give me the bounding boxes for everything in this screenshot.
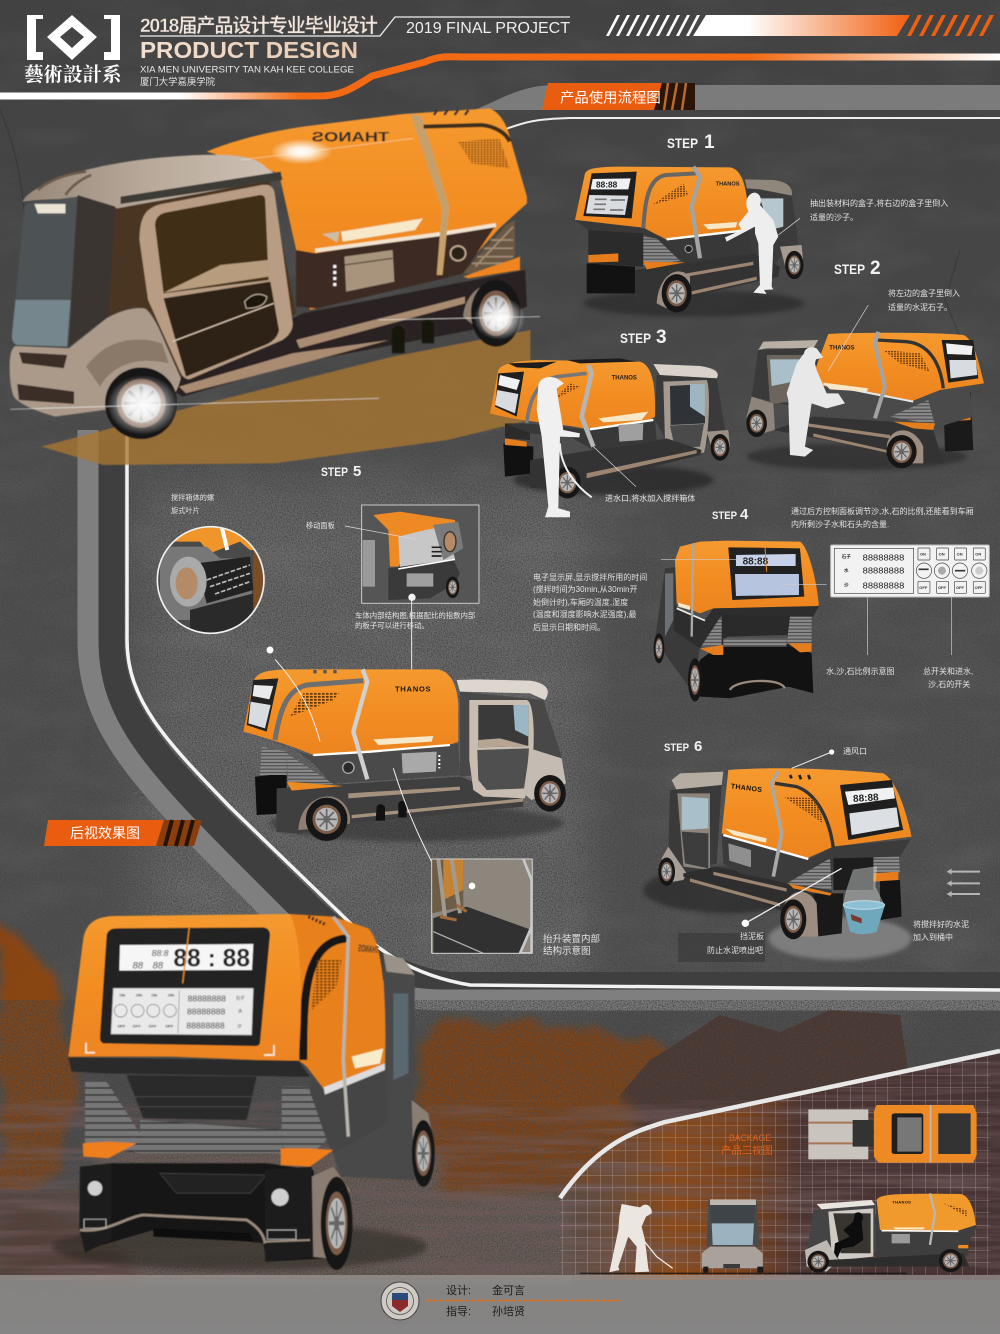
step 2 rear block: [943, 392, 973, 452]
rear display frame: [100, 927, 270, 1046]
step 1 description: 抽出装材料的盒子,将右边的盒子里倒入: [810, 198, 948, 208]
step 3 display: [495, 372, 524, 417]
step 6 vehicle: THANOS: [730, 783, 763, 794]
step 6 display: [840, 780, 903, 840]
step 1 pointer: [778, 218, 800, 235]
large rear vehicle: OFF: [149, 1024, 157, 1029]
inset: lift mechanism: [432, 859, 532, 953]
step 4 vents: [722, 615, 812, 650]
circular detail: mixer blades: [157, 527, 264, 633]
control panel diagram: OFF: [938, 585, 946, 590]
step 3 heading: 3: [656, 327, 667, 348]
step 1 vehicle: THANOS: [716, 181, 740, 187]
step 3 vehicle: THANOS: [612, 375, 637, 381]
step 1 description: 适量的沙子。: [810, 212, 858, 222]
step 6 wheels: [782, 892, 818, 937]
step 1 vehicle: 88:88: [596, 180, 618, 190]
step 4 paragraph: (温度和湿度影响水泥强度),最: [533, 609, 637, 619]
step 1 wheels: [657, 271, 690, 308]
large rear vehicle: 水: [238, 1008, 243, 1014]
chassis: [162, 270, 527, 397]
step 6 tank: [722, 768, 912, 858]
step 1 tank: [575, 167, 748, 240]
step 4 vehicle rear view: [654, 541, 989, 702]
hero vehicle side view: [10, 108, 540, 465]
back package title: [721, 1133, 773, 1157]
step 1 worker: [725, 193, 778, 294]
step 1 rear block: [587, 263, 635, 293]
large rear vehicle: ON: [119, 993, 125, 998]
rear vehicle cab: [333, 953, 433, 1180]
mirrored brand: THANOS: [312, 130, 389, 146]
step 4 description: 内所剩沙子水和石头的含量.: [791, 519, 889, 529]
step 2 heading: 2: [870, 258, 881, 279]
bottom translucent strip: [0, 1275, 1000, 1325]
department name: 藝術設計系: [24, 59, 122, 87]
large rear vehicle: THANOS: [357, 943, 379, 956]
control panel diagram: OFF: [919, 585, 928, 590]
step 5 tank: [243, 669, 458, 755]
college name: XIA MEN UNIVERSITY TAN KAH KEE COLLEGE: [140, 64, 354, 76]
step 6 vehicle: [643, 749, 980, 960]
door window: [155, 195, 269, 293]
chinese title: 2018届产品设计专业毕业设计: [140, 15, 378, 37]
tan strap: [411, 113, 449, 275]
rear display top: [119, 944, 253, 971]
switch caption: [923, 666, 973, 689]
front wheel: [105, 367, 177, 439]
header rule: [140, 17, 570, 36]
blade caption: 搅拌箱体的螺: [171, 493, 214, 502]
step 4 description: [791, 506, 974, 529]
water hose: [560, 443, 592, 497]
step 2 description: 将左边的盒子里倒入: [888, 288, 960, 298]
ground line: [580, 1272, 907, 1275]
control panel diagram: 水: [844, 567, 849, 573]
pointer dot: tank curve: [266, 646, 274, 654]
flow arrows: [947, 869, 980, 897]
step 6 heading: STEP: [664, 742, 689, 754]
step 2 description: [888, 288, 960, 312]
switch caption: 总开关和进水,: [923, 666, 973, 676]
step 5 rear block: [255, 773, 287, 815]
step 1 heading: [667, 132, 715, 153]
structure caption: 车体内部结构图,根据配比的指数内部: [355, 611, 475, 620]
rear vent: [463, 220, 515, 273]
step 4 heading: STEP: [712, 510, 737, 522]
vent caption: 通风口: [843, 746, 867, 756]
college chinese name: 厦门大学嘉庚学院: [140, 76, 216, 87]
mudguard caption: [707, 931, 764, 955]
designer credit: 设计:: [446, 1284, 471, 1297]
side view: [805, 1193, 977, 1272]
lift caption: 抬升装置内部: [543, 933, 600, 945]
step 5 heading: [321, 463, 361, 480]
final project label: 2019 FINAL PROJECT: [406, 20, 570, 37]
step 4 lower body: [693, 643, 813, 698]
mudguard note backing: [678, 933, 765, 962]
inset: internal structure: [344, 504, 480, 670]
header stripes: [606, 15, 994, 36]
step 2 chassis: [773, 417, 943, 463]
step 4 display: [728, 547, 804, 600]
large rear vehicle: OFF: [133, 1024, 141, 1029]
compartment: [344, 250, 394, 292]
header orange swoosh: [0, 57, 1000, 96]
large rear vehicle: ON: [151, 993, 157, 998]
control panel diagram: ON: [975, 552, 981, 557]
step 3 description: 进水口,将水加入搅拌箱体: [605, 493, 695, 503]
control panel diagram: ON: [939, 552, 945, 557]
rear orange face: [68, 914, 301, 1062]
step 5 chassis: [277, 777, 523, 833]
dot grille: [458, 138, 510, 168]
step 4 cab side: [655, 567, 700, 693]
lift caption: 结构示意图: [543, 945, 591, 957]
large rear vehicle: 88888888: [186, 1021, 225, 1031]
switch caption: 沙,石的开关: [928, 679, 970, 689]
silver roof: [22, 155, 282, 208]
front view: [702, 1199, 763, 1273]
white road line: [127, 430, 1000, 990]
step 6 vehicle: 88:88: [853, 792, 879, 805]
large rear vehicle: 沙: [237, 1023, 242, 1028]
large rear vehicle: ON: [168, 993, 174, 998]
control panel diagram: 88888888: [863, 552, 905, 562]
control panel diagram: ON: [920, 552, 926, 557]
windshield: [12, 197, 77, 347]
large rear vehicle: 石子: [236, 994, 245, 1001]
section tag: usage flow: 产品使用流程图: [560, 90, 661, 106]
header title group: [140, 15, 570, 87]
three views: [580, 1105, 977, 1273]
large rear vehicle: [53, 914, 435, 1270]
white trim: [315, 225, 496, 251]
blade caption: [171, 493, 214, 515]
step 5 heading: 5: [353, 463, 361, 480]
step 5 display: [247, 678, 278, 732]
dashed rule: [426, 1300, 622, 1302]
lens flares: [107, 375, 179, 435]
step 4 description: 通过后方控制面板调节沙,水,石的比例,还能看到车厢: [791, 506, 974, 516]
top view: [808, 1105, 977, 1163]
step 2 wheels: [887, 430, 923, 463]
rear wheel: [463, 284, 517, 327]
step 3 rear block: [503, 443, 533, 477]
control panel diagram: 88888888: [863, 581, 905, 591]
step 3 chassis: [530, 438, 702, 488]
designer credit: 金可言: [492, 1283, 525, 1297]
step 5 heading: STEP: [321, 465, 348, 479]
structure caption: 的板子可以进行移动。: [355, 621, 429, 630]
ratio caption: 水,沙,石比例示意图: [826, 666, 894, 676]
vertical pointer: [410, 597, 413, 697]
large rear vehicle: OFF: [117, 1024, 126, 1029]
large rear vehicle: 88 : 88: [173, 946, 250, 973]
structure caption: [355, 611, 475, 630]
seal emblem: [381, 1282, 419, 1320]
step 5 vehicle side view: THANOS: [395, 684, 431, 693]
step 4 heading: [712, 506, 749, 523]
control panel diagram: OFF: [975, 585, 983, 590]
step 4 paragraph: 始倒计时),车厢的温度,湿度: [533, 597, 628, 607]
pouring caption: [913, 919, 969, 942]
control panel diagram: 沙: [844, 583, 849, 588]
back package title: BACKAGE: [729, 1133, 771, 1144]
step 5 vehicle side view: [243, 659, 566, 932]
lift caption: [543, 933, 600, 957]
side view: THANOS: [892, 1199, 911, 1204]
a pillar: [69, 195, 115, 347]
step 6 heading: [664, 738, 702, 755]
step 4 vehicle rear view: 88:88: [743, 556, 769, 567]
hitch pods: [392, 319, 434, 353]
step 1 cab: [745, 180, 798, 267]
section tag: rear view: [44, 820, 202, 846]
control panel diagram: OFF: [956, 585, 964, 590]
gray road band: [88, 430, 1000, 1000]
orange tank: [207, 108, 527, 310]
bottom landscape: [0, 925, 1000, 1280]
step 2 vehicle: THANOS: [829, 345, 855, 351]
dark vent line: [424, 125, 510, 142]
panel pointer: [345, 526, 416, 539]
rear vehicle shadow: [53, 1223, 427, 1270]
control panel diagram: 石子: [842, 553, 851, 560]
step 1 heading: STEP: [667, 135, 698, 151]
pointer: mudguard: [745, 868, 842, 923]
step 1 description: [810, 198, 948, 222]
worker silhouette: [609, 1204, 673, 1272]
mudguard caption: 防止水泥喷出吧: [707, 945, 763, 955]
step 6 cab: [672, 772, 723, 790]
step 2 vehicle: [746, 305, 984, 470]
step 4 tank: [675, 541, 819, 613]
filler ring: [450, 246, 466, 261]
logo mark: [27, 15, 120, 60]
control panel diagram: ON: [957, 552, 963, 557]
step 3 wheels: [554, 467, 581, 498]
back package title: 产品三视图: [721, 1144, 773, 1157]
blade caption: 旋式叶片: [171, 506, 200, 515]
step 3 heading: [620, 327, 667, 348]
light bar: [341, 218, 423, 242]
grilles: [19, 352, 67, 368]
large rear vehicle: 88: [133, 960, 144, 970]
step 3 vehicle: [490, 358, 730, 517]
step 3 heading: STEP: [620, 330, 651, 346]
step 2 cab: [758, 340, 818, 350]
dark road shoulder: [106, 440, 1000, 990]
step 5 wheels: [298, 796, 350, 830]
step 1 vehicle: [575, 167, 803, 317]
large rear vehicle: 88888888: [187, 1007, 225, 1017]
pointers: [275, 659, 470, 932]
rear bumper: [80, 1215, 265, 1243]
mudguard caption: 挡泥板: [740, 931, 764, 941]
step 3 cab: [653, 364, 718, 378]
rear vehicle side panel: [290, 914, 385, 1088]
corner brackets: [86, 1043, 274, 1055]
step 1 heading: 1: [704, 132, 715, 153]
pouring caption: 加入到桶中: [913, 932, 953, 942]
step 3 worker: [537, 377, 580, 517]
section tag: rear view: 后视效果图: [70, 825, 140, 841]
designer credit: [446, 1283, 525, 1297]
rear lamps: [88, 1181, 102, 1196]
top gray road band: [470, 85, 1000, 112]
step 6 chassis: [683, 867, 840, 937]
step 3 pointer: [593, 447, 636, 487]
step 2 heading: STEP: [834, 261, 865, 277]
bucket: [843, 901, 885, 934]
advisor credit: 孙培贤: [492, 1304, 525, 1318]
large rear vehicle: 88888888: [188, 994, 226, 1004]
large rear vehicle: ON: [136, 993, 142, 998]
rear vehicle lower structure: [80, 1163, 327, 1262]
pointer: vent: [792, 752, 832, 768]
step 4 paragraph: (搅拌时间为30min,从30min开: [533, 584, 637, 594]
top white road line: [503, 118, 1000, 130]
large rear vehicle: 88:8: [152, 948, 169, 958]
step 1 display: [583, 172, 637, 218]
step 4 heading: 4: [740, 506, 749, 523]
moving panel caption: 移动面板: [306, 521, 335, 530]
step 4 paragraph: 后显示日期和时间。: [533, 622, 605, 632]
english title: PRODUCT DESIGN: [140, 37, 358, 63]
control panel diagram: [831, 545, 989, 597]
cab body: [107, 175, 296, 378]
mudguard bag: [843, 867, 883, 905]
step 6 heading: 6: [694, 738, 702, 755]
callout lines: [661, 559, 952, 655]
front nose: [10, 308, 181, 417]
step 1 chassis: [635, 253, 780, 307]
advisor credit: [446, 1304, 525, 1318]
door lower: [164, 282, 279, 377]
section tag: usage flow: [542, 83, 695, 110]
orange seam: [183, 927, 189, 983]
headlights: [34, 204, 65, 213]
ground sand shadow: [41, 330, 530, 465]
large rear vehicle: OFF: [165, 1024, 174, 1029]
step 5 cab: [460, 692, 562, 777]
large rear vehicle: 88: [153, 960, 164, 970]
step 6 ground: [768, 917, 912, 960]
rear vents: [127, 1075, 257, 1120]
control panel diagram: 88888888: [863, 565, 905, 575]
step 3 tank: [490, 360, 655, 430]
led dots: [330, 265, 339, 288]
pouring caption: 将搅拌好的水泥: [913, 919, 969, 929]
door frame: [139, 185, 293, 379]
step 4 paragraph: 电子显示屏,显示搅拌所用的时间: [533, 572, 647, 582]
step 6 rear block: [880, 880, 902, 920]
step 4 paragraph: [533, 572, 647, 632]
tank lower panel: [296, 225, 496, 308]
three view grid panel: [560, 1040, 1000, 1280]
step 2 heading: [834, 258, 881, 279]
step 2 worker: [787, 347, 845, 457]
rear display bottom: [111, 988, 253, 1035]
step 2 pointer: [828, 305, 868, 371]
white curve over three view panel: [560, 1051, 1000, 1198]
step 2 tank: [815, 333, 984, 401]
step 2 display: [942, 340, 978, 383]
step 2 description: 适量的水泥石子。: [888, 302, 952, 312]
bottom gray edge: [0, 1325, 1000, 1334]
advisor credit: 指导:: [446, 1304, 471, 1318]
